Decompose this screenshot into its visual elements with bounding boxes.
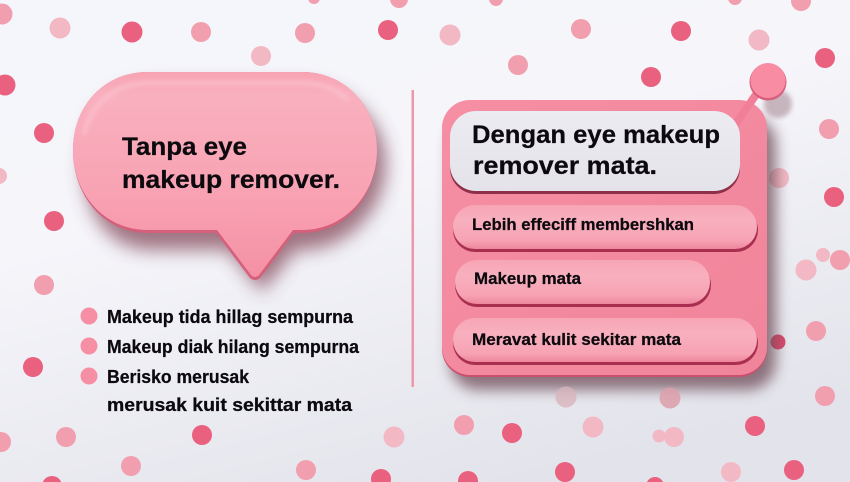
bullet list: without remover: Makeup diak hilang sempurna [107, 337, 360, 357]
speech bubble: Tanpa eye makeup remover [73, 72, 386, 292]
bullet list: without remover [80, 307, 360, 415]
panel: with remover [442, 63, 792, 390]
faded dots under panel [556, 386, 680, 408]
bullet list: without remover: merusak kuit sekittar mata [107, 395, 353, 415]
bullet list: without remover: Makeup tida hillag sempurna [107, 307, 354, 327]
bullet list: without remover: Berisko merusak [107, 367, 250, 387]
divider [412, 90, 414, 387]
row: benefit 1: Lebih effeciff membershkan [472, 215, 694, 234]
row: benefit 2: Makeup mata [474, 269, 582, 288]
heading card [450, 111, 740, 194]
row: benefit 3: Meravat kulit sekitar mata [472, 330, 682, 349]
row: benefit 2 [455, 260, 711, 307]
bubble heading: makeup remover. [122, 166, 340, 194]
heading card: remover mata. [473, 152, 657, 180]
heading card: Dengan eye makeup [472, 121, 720, 149]
row: benefit 1 [453, 205, 758, 252]
bubble heading [122, 133, 340, 194]
icon: pin [737, 63, 792, 122]
row: benefit 3 [453, 318, 758, 365]
bubble heading: Tanpa eye [122, 133, 247, 161]
